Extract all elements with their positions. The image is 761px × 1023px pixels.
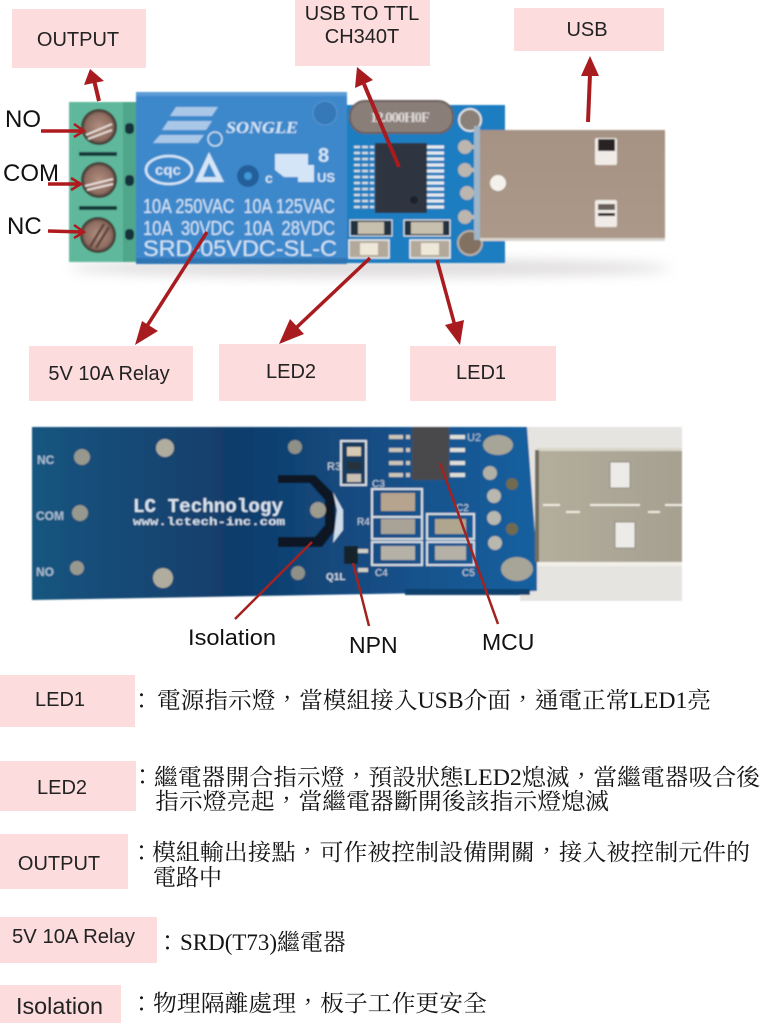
label: OUTPUT bbox=[12, 9, 146, 68]
blue relay bbox=[136, 92, 505, 264]
usb plug bbox=[535, 448, 682, 566]
blue relay: 10A 30VDC 10A 28VDC bbox=[143, 218, 335, 240]
blue board: C5 bbox=[462, 568, 475, 579]
label: 5V 10A Relay: 5V 10A Relay bbox=[48, 363, 170, 385]
blue board: C3 bbox=[372, 479, 385, 490]
label: NO: NO bbox=[5, 106, 41, 133]
row: Isolation description: ： bbox=[130, 991, 153, 1016]
row: 5V 10A Relay description: 5V 10A Relay bbox=[12, 926, 135, 948]
blue board: R4 bbox=[357, 517, 370, 528]
arrow: NO bbox=[41, 124, 84, 137]
blue board bbox=[32, 427, 537, 600]
row: LED1 description: LED1 bbox=[35, 689, 85, 711]
blue board: NO bbox=[36, 565, 54, 579]
blue board: NC bbox=[37, 453, 55, 467]
row: LED2 description: 繼電器開合指示燈，預設狀態LED2熄滅，當繼電器吸合後 bbox=[154, 765, 760, 790]
row: OUTPUT description: 模組輸出接點，可作被控制設備開關，接入被控制元件的 bbox=[152, 840, 750, 865]
row: 5V 10A Relay description: SRD(T73)繼電器 bbox=[180, 930, 346, 955]
blue board: Q1L bbox=[326, 572, 345, 583]
label: OUTPUT: OUTPUT bbox=[37, 29, 119, 51]
arrow: COM bbox=[48, 178, 81, 190]
label: MCU: MCU bbox=[482, 629, 534, 655]
row: OUTPUT description: ： bbox=[130, 840, 153, 865]
crystal and CH340T chip bbox=[350, 101, 453, 213]
row: LED2 description bbox=[0, 761, 760, 814]
LEDs and resistors bbox=[349, 220, 450, 258]
blue relay: cqc bbox=[155, 162, 181, 179]
row: LED1 description: 電源指示燈，當模組接入USB介面，通電正常LED1亮 bbox=[157, 688, 711, 713]
label: USB: USB bbox=[566, 19, 608, 41]
arrow: MCU bbox=[440, 463, 498, 624]
blue relay: 10A 250VAC 10A 125VAC bbox=[143, 196, 335, 218]
row: 5V 10A Relay description: ： bbox=[156, 930, 179, 955]
label: USB bbox=[514, 8, 664, 51]
row: LED1 description bbox=[0, 675, 711, 727]
terminal block bbox=[69, 102, 136, 262]
row: Isolation description: 物理隔離處理，板子工作更安全 bbox=[153, 991, 487, 1016]
row: LED1 description: ： bbox=[130, 688, 153, 713]
label: Isolation: Isolation bbox=[188, 625, 276, 650]
arrow: USB TO TTL bbox=[355, 67, 399, 167]
USB plug bbox=[458, 109, 665, 255]
row: OUTPUT description bbox=[0, 834, 750, 890]
row: 5V 10A Relay description bbox=[0, 917, 346, 963]
blue board: www.lctech-inc.com bbox=[133, 517, 285, 529]
blue relay: SRD-05VDC-SL-C bbox=[143, 236, 337, 261]
photo: relay module top side bbox=[69, 92, 670, 277]
blue board: C2 bbox=[456, 503, 469, 514]
row: Isolation description: Isolation bbox=[16, 993, 103, 1019]
arrow: NC bbox=[48, 225, 84, 238]
label: LED2 bbox=[219, 344, 366, 401]
arrow: LED2 bbox=[279, 258, 370, 344]
label: LED1 bbox=[410, 346, 556, 401]
label: USB TO TTL CH340T: CH340T bbox=[325, 26, 399, 48]
label: NC: NC bbox=[7, 213, 42, 240]
label: NPN: NPN bbox=[349, 632, 398, 658]
arrow: LED1 bbox=[437, 260, 464, 345]
label: LED1: LED1 bbox=[456, 362, 506, 384]
arrow: Isolation bbox=[235, 542, 312, 619]
usb plug background bbox=[520, 427, 682, 601]
blue board: R3 bbox=[327, 461, 341, 473]
crystal and CH340T chip: 12.000H0F bbox=[370, 110, 430, 126]
blue relay: US bbox=[317, 170, 335, 185]
row: LED2 description: ： bbox=[131, 764, 154, 789]
blue board: U2 bbox=[467, 432, 481, 444]
blue relay: SONGLE bbox=[226, 118, 298, 137]
blue board: C4 bbox=[375, 568, 388, 579]
blue board: COM bbox=[36, 509, 64, 523]
blue board: LC Technology bbox=[133, 496, 284, 518]
row: LED2 description: LED2 bbox=[37, 777, 87, 799]
row: OUTPUT description: OUTPUT bbox=[18, 853, 100, 875]
arrow: USB bbox=[581, 56, 599, 122]
label: LED2: LED2 bbox=[266, 361, 316, 383]
arrow: OUTPUT bbox=[84, 69, 104, 101]
row: LED2 description: 指示燈亮起，當繼電器斷開後該指示燈熄滅 bbox=[155, 789, 609, 814]
label: USB TO TTL CH340T bbox=[295, 0, 430, 66]
row: Isolation description bbox=[0, 985, 487, 1023]
blue relay: c bbox=[265, 170, 273, 186]
label: USB TO TTL CH340T: USB TO TTL bbox=[305, 3, 419, 25]
arrow: Relay bbox=[135, 232, 207, 345]
arrow: NPN bbox=[353, 563, 369, 626]
label: 5V 10A Relay bbox=[29, 346, 193, 401]
row: OUTPUT description: 電路中 bbox=[153, 865, 222, 890]
label: COM: COM bbox=[3, 160, 59, 187]
blue relay: 8 bbox=[318, 145, 329, 167]
photo: relay module back side bbox=[32, 427, 682, 601]
